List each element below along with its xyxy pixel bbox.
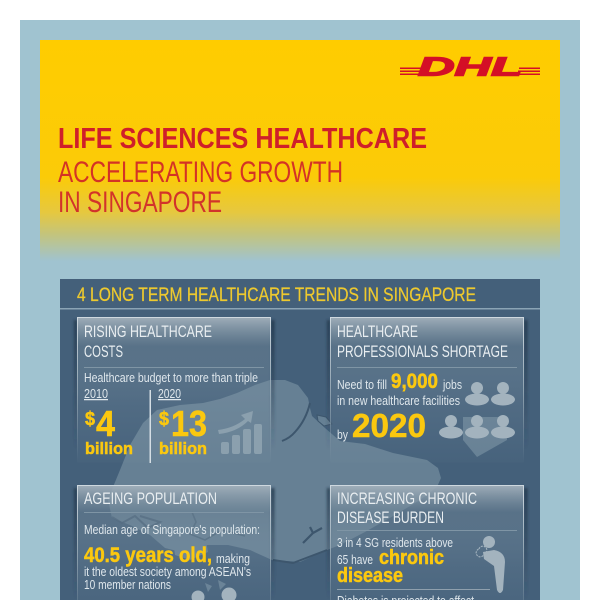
panel: rising healthcare costs: 2010 bbox=[84, 387, 108, 401]
panel: healthcare professionals shortage: 9,000 bbox=[391, 370, 438, 393]
DHL logo bbox=[400, 52, 540, 82]
panel: healthcare professionals shortage: 2020 bbox=[352, 407, 426, 444]
panel: rising healthcare costs bbox=[74, 318, 274, 463]
icon: healthcare workers bbox=[439, 382, 515, 438]
divider bbox=[60, 308, 540, 310]
value: 2020 budget: billion bbox=[159, 439, 207, 458]
icon: coughing person bbox=[476, 536, 505, 593]
panel: increasing chronic disease burden: DISEASE BURDEN bbox=[337, 509, 444, 527]
icon: elderly couple bbox=[192, 588, 236, 600]
panel: increasing chronic disease burden: 65 have bbox=[337, 553, 373, 567]
panel: healthcare trends bbox=[60, 279, 540, 600]
panel: increasing chronic disease burden bbox=[327, 486, 528, 600]
panel: healthcare professionals shortage: HEALTHCARE bbox=[337, 323, 418, 341]
title: IN SINGAPORE bbox=[58, 186, 222, 219]
value: 2020 budget bbox=[159, 403, 207, 458]
section heading: 4 LONG TERM HEALTHCARE TRENDS IN SINGAPORE bbox=[77, 284, 476, 306]
title: LIFE SCIENCES HEALTHCARE bbox=[58, 123, 427, 155]
title: ACCELERATING GROWTH bbox=[58, 156, 343, 189]
value: 2020 budget: 13 bbox=[171, 403, 207, 444]
value: 2010 budget bbox=[85, 403, 133, 458]
panel: ageing population bbox=[74, 486, 274, 600]
value: 2010 budget: $ bbox=[85, 409, 95, 430]
panel: healthcare professionals shortage: Need to fill bbox=[337, 378, 387, 392]
panel: ageing population: 40.5 years old, bbox=[84, 544, 212, 567]
panel: ageing population: Median age of Singapore's population: bbox=[84, 523, 260, 537]
DHL logo: DHL bbox=[418, 52, 522, 82]
title bbox=[58, 123, 427, 219]
panel: healthcare professionals shortage: by bbox=[337, 428, 349, 442]
panel: increasing chronic disease burden: 3 in 4 SG residents above bbox=[337, 536, 453, 550]
value: 2010 budget: 4 bbox=[96, 403, 115, 444]
panel: rising healthcare costs: RISING HEALTHCARE bbox=[84, 323, 212, 341]
panel: rising healthcare costs: COSTS bbox=[84, 343, 123, 361]
map of Singapore bbox=[108, 380, 507, 592]
panel: increasing chronic disease burden: INCREASING CHRONIC bbox=[337, 490, 477, 508]
header banner bbox=[40, 40, 560, 261]
value: 2020 budget: $ bbox=[159, 409, 169, 430]
panel: increasing chronic disease burden: disease bbox=[337, 565, 403, 587]
value: 2010 budget: billion bbox=[85, 439, 133, 458]
icon: rising bar chart bbox=[218, 411, 262, 454]
panel: healthcare professionals shortage: in new healthcare facilities bbox=[337, 394, 460, 408]
panel: healthcare professionals shortage: jobs bbox=[442, 378, 462, 392]
panel: healthcare professionals shortage: PROFESSIONALS SHORTAGE bbox=[337, 343, 508, 361]
panel: ageing population: it the oldest society among ASEAN's bbox=[84, 565, 251, 579]
panel: rising healthcare costs: 2020 bbox=[158, 387, 181, 401]
panel: ageing population: AGEING POPULATION bbox=[84, 490, 217, 508]
panel: increasing chronic disease burden: chronic bbox=[379, 547, 444, 569]
panel: healthcare professionals shortage bbox=[327, 318, 528, 462]
panel: rising healthcare costs: Healthcare budget to more than triple bbox=[84, 371, 258, 385]
panel: ageing population: making bbox=[216, 552, 250, 566]
panel: ageing population: 10 member nations bbox=[84, 578, 171, 592]
